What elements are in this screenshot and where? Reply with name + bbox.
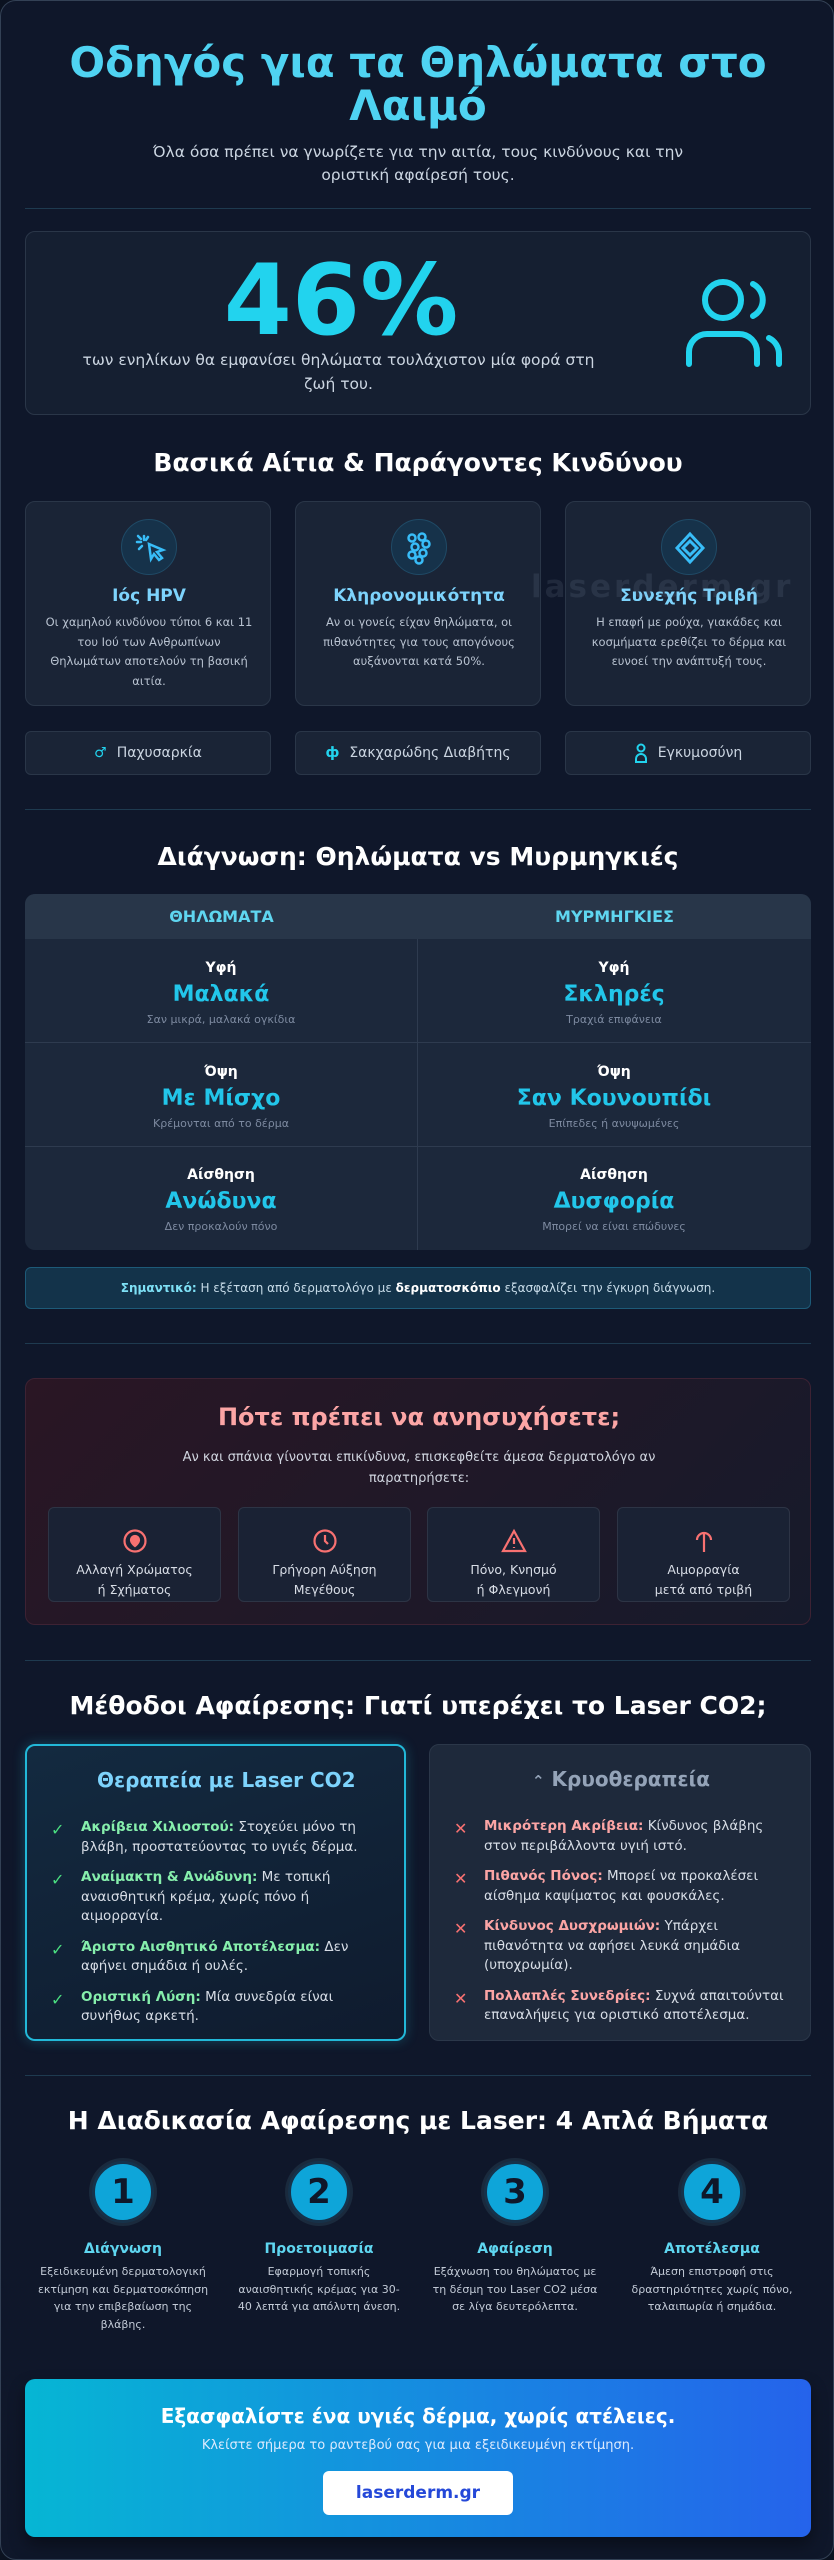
panel: cryo: Πολλαπλές Συνεδρίες: Συχνά απαιτούνται επαναλήψεις για οριστικό αποτέλεσμα.	[484, 1988, 784, 2023]
table: comparison: Σαν μικρά, μαλακά ογκίδια	[147, 1013, 295, 1026]
box: pain: Πόνο, Κνησμό	[470, 1562, 557, 1577]
step 4: 4	[700, 2172, 724, 2212]
icon: dna	[391, 519, 447, 575]
step 2: Εφαρμογή τοπικής αναισθητικής κρέμας για 30-40 λεπτά για απόλυτη άνεση.	[238, 2265, 400, 2313]
pill: pregnancy	[565, 731, 811, 775]
box: color change: ή Σχήματος	[98, 1582, 171, 1597]
pill: diabetes	[295, 731, 541, 775]
card: friction	[565, 501, 811, 706]
step 2	[238, 2158, 400, 2313]
cta	[25, 2379, 811, 2537]
panel: cryo: ✕	[454, 1988, 467, 2008]
step 4	[631, 2158, 793, 2313]
card: HPV	[25, 501, 271, 706]
heading: steps: Η Διαδικασία Αφαίρεσης με Laser: 4 Απλά Βήματα	[68, 2106, 768, 2135]
step 2: 2	[307, 2172, 331, 2212]
panel: laser: ✓	[51, 1820, 64, 1839]
step 1	[38, 2158, 208, 2330]
card: friction: Η επαφή με ρούχα, γιακάδες και κοσμήματα ερεθίζει το δέρμα και ευνοεί την ανάπτυξή τους.	[592, 615, 786, 668]
pill: obesity: Παχυσαρκία	[117, 745, 202, 761]
icon: diamond	[661, 519, 717, 575]
step 2: Προετοιμασία	[264, 2241, 374, 2257]
table: comparison: ΘΗΛΩΜΑΤΑ	[169, 907, 274, 926]
box: growth	[238, 1507, 411, 1602]
step 3	[433, 2158, 597, 2313]
step 4: Αποτέλεσμα	[664, 2241, 760, 2257]
box: color change: Αλλαγή Χρώματος	[76, 1562, 193, 1577]
title: Οδηγός για τα Θηλώματα στο Λαιμό	[69, 38, 767, 130]
step 4: Άμεση επιστροφή στις δραστηριότητες χωρίς πόνο, ταλαιπωρία ή σημάδια.	[631, 2265, 793, 2313]
table: comparison: Δεν προκαλούν πόνο	[165, 1220, 277, 1233]
panel: stat	[25, 231, 811, 415]
heading: methods: Μέθοδοι Αφαίρεσης: Γιατί υπερέχει το Laser CO2;	[70, 1691, 766, 1720]
table: comparison: Μαλακά	[173, 982, 269, 1007]
icon: users	[686, 279, 782, 367]
panel: cryo: ✕	[454, 1919, 467, 1938]
panel: laser: ✓	[51, 1990, 64, 2008]
subtitle: Όλα όσα πρέπει να γνωρίζετε για την αιτία, τους κινδύνους και την οριστική αφαίρεσή τους.	[153, 143, 683, 184]
panel: cryo	[429, 1744, 811, 2041]
panel: cryo: ⌃ Κρυοθεραπεία	[532, 1767, 710, 1791]
warning text: Αν και σπάνια γίνονται επικίνδυνα, επισκεφθείτε άμεσα δερματολόγο αν παρατηρήσετε:	[183, 1450, 655, 1486]
pill: pregnancy: Εγκυμοσύνη	[658, 745, 742, 761]
stat number: 46%	[224, 244, 458, 358]
step 3: Αφαίρεση	[477, 2241, 553, 2257]
table: comparison: Υφή	[205, 960, 237, 976]
step 3: Εξάχνωση του θηλώματος με τη δέσμη του Laser CO2 μέσα σε λίγα δευτερόλεπτα.	[433, 2265, 597, 2313]
panel: cryo: Πιθανός Πόνος: Μπορεί να προκαλέσει αίσθημα καψίματος και φουσκάλες.	[484, 1868, 758, 1904]
callout: important	[25, 1267, 811, 1309]
cta: Κλείστε σήμερα το ραντεβού σας για μια εξειδικευμένη εκτίμηση.	[202, 2438, 634, 2453]
table: comparison	[25, 894, 811, 1250]
box: growth: Μεγέθους	[294, 1582, 355, 1597]
panel: cryo: ✕	[454, 1869, 467, 1888]
heading: diagnosis: Διάγνωση: Θηλώματα vs Μυρμηγκιές	[157, 842, 679, 871]
card: heredity	[295, 501, 541, 706]
panel: cryo: ✕	[454, 1819, 467, 1838]
panel: laser: Οριστική Λύση: Μία συνεδρία είναι συνήθως αρκετή.	[81, 1988, 333, 2024]
stat text: των ενηλίκων θα εμφανίσει θηλώματα τουλάχιστον μία φορά στη ζωή του.	[82, 351, 594, 393]
panel: laser: ✓	[51, 1870, 64, 1889]
table: comparison: Επίπεδες ή ανυψωμένες	[549, 1117, 679, 1130]
panel: laser: Ακρίβεια Χιλιοστού: Στοχεύει μόνο τη βλάβη, προστατεύοντας το υγιές δέρμα.	[81, 1819, 358, 1854]
table: comparison: Όψη	[597, 1064, 631, 1080]
warning title: Πότε πρέπει να ανησυχήσετε;	[218, 1403, 620, 1431]
table: comparison: Αίσθηση	[580, 1167, 648, 1183]
panel: laser	[25, 1744, 406, 2041]
table: comparison: Κρέμονται από το δέρμα	[153, 1117, 289, 1130]
callout: important: Σημαντικό: Η εξέταση από δερματολόγο με δερματοσκόπιο εξασφαλίζει την έγκυρη διάγνωση.	[121, 1281, 715, 1295]
watermark: laserderm.gr	[531, 569, 793, 605]
cta: Εξασφαλίστε ένα υγιές δέρμα, χωρίς ατέλειες.	[161, 2404, 675, 2428]
table: comparison: ΜΥΡΜΗΓΚΙΕΣ	[555, 907, 674, 926]
table: comparison: Υφή	[598, 960, 630, 976]
panel: cryo: Κίνδυνος Δυσχρωμιών: Υπάρχει πιθανότητα να αφήσει λευκά σημάδια (υποχρωμία).	[484, 1918, 740, 1973]
table: comparison: Τραχιά επιφάνεια	[566, 1013, 662, 1026]
card: heredity: Αν οι γονείς είχαν θηλώματα, οι πιθανότητες για τους απογόνους αυξάνονται κατά 50%.	[323, 615, 515, 668]
pill: obesity: ♂	[94, 745, 107, 761]
heading: causes: Βασικά Αίτια & Παράγοντες Κινδύνου	[153, 448, 683, 477]
step 1: Εξειδικευμένη δερματολογική εκτίμηση και δερματοσκόπηση για την επιβεβαίωση της βλάβης.	[38, 2265, 208, 2330]
step 1: Διάγνωση	[84, 2241, 162, 2257]
box: bleeding: Αιμορραγία	[667, 1562, 740, 1577]
button	[323, 2471, 513, 2515]
card: heredity: Κληρονομικότητα	[333, 586, 505, 606]
table: comparison: Ανώδυνα	[165, 1189, 277, 1214]
step 3: 3	[503, 2172, 527, 2212]
panel: laser: ✓	[51, 1940, 64, 1958]
pill: diabetes: Σακχαρώδης Διαβήτης	[349, 745, 511, 761]
pill: obesity	[25, 731, 271, 775]
panel: cryo: Μικρότερη Ακρίβεια: Κίνδυνος βλάβης στον περιβάλλοντα υγιή ιστό.	[484, 1818, 763, 1854]
box: growth: Γρήγορη Αύξηση	[272, 1562, 377, 1577]
step 1: 1	[111, 2172, 135, 2212]
panel: laser: Άριστο Αισθητικό Αποτέλεσμα: Δεν αφήνει σημάδια ή ουλές.	[81, 1938, 348, 1974]
card: HPV: Ιός HPV	[112, 586, 186, 606]
table: comparison: Όψη	[204, 1064, 238, 1080]
card: friction: Συνεχής Τριβή	[620, 586, 758, 606]
icon: pointer	[121, 519, 177, 575]
box: bleeding: μετά από τριβή	[655, 1582, 752, 1597]
panel: warning	[25, 1378, 811, 1625]
table: comparison: Μπορεί να είναι επώδυνες	[542, 1220, 686, 1233]
card: HPV: Οι χαμηλού κινδύνου τύποι 6 και 11 του Ιού των Ανθρωπίνων Θηλωμάτων αποτελούν τη βασική αιτία.	[46, 615, 252, 688]
box: bleeding	[617, 1507, 790, 1602]
box: pain: ή Φλεγμονή	[477, 1582, 550, 1597]
table: comparison: Δυσφορία	[554, 1189, 674, 1214]
panel: laser: Αναίμακτη & Ανώδυνη: Με τοπική αναισθητική κρέμα, χωρίς πόνο ή αιμορραγία.	[81, 1869, 330, 1924]
table: comparison: Σαν Κουνουπίδι	[517, 1086, 711, 1111]
table: comparison: Σκληρές	[563, 982, 665, 1007]
panel: laser: Θεραπεία με Laser CO2	[97, 1768, 356, 1792]
table: comparison: Αίσθηση	[187, 1167, 255, 1183]
box: color change	[48, 1507, 221, 1602]
button: laserderm.gr	[356, 2483, 480, 2503]
pill: diabetes: ф	[325, 745, 339, 761]
box: pain	[427, 1507, 600, 1602]
table: comparison: Με Μίσχο	[162, 1086, 280, 1111]
